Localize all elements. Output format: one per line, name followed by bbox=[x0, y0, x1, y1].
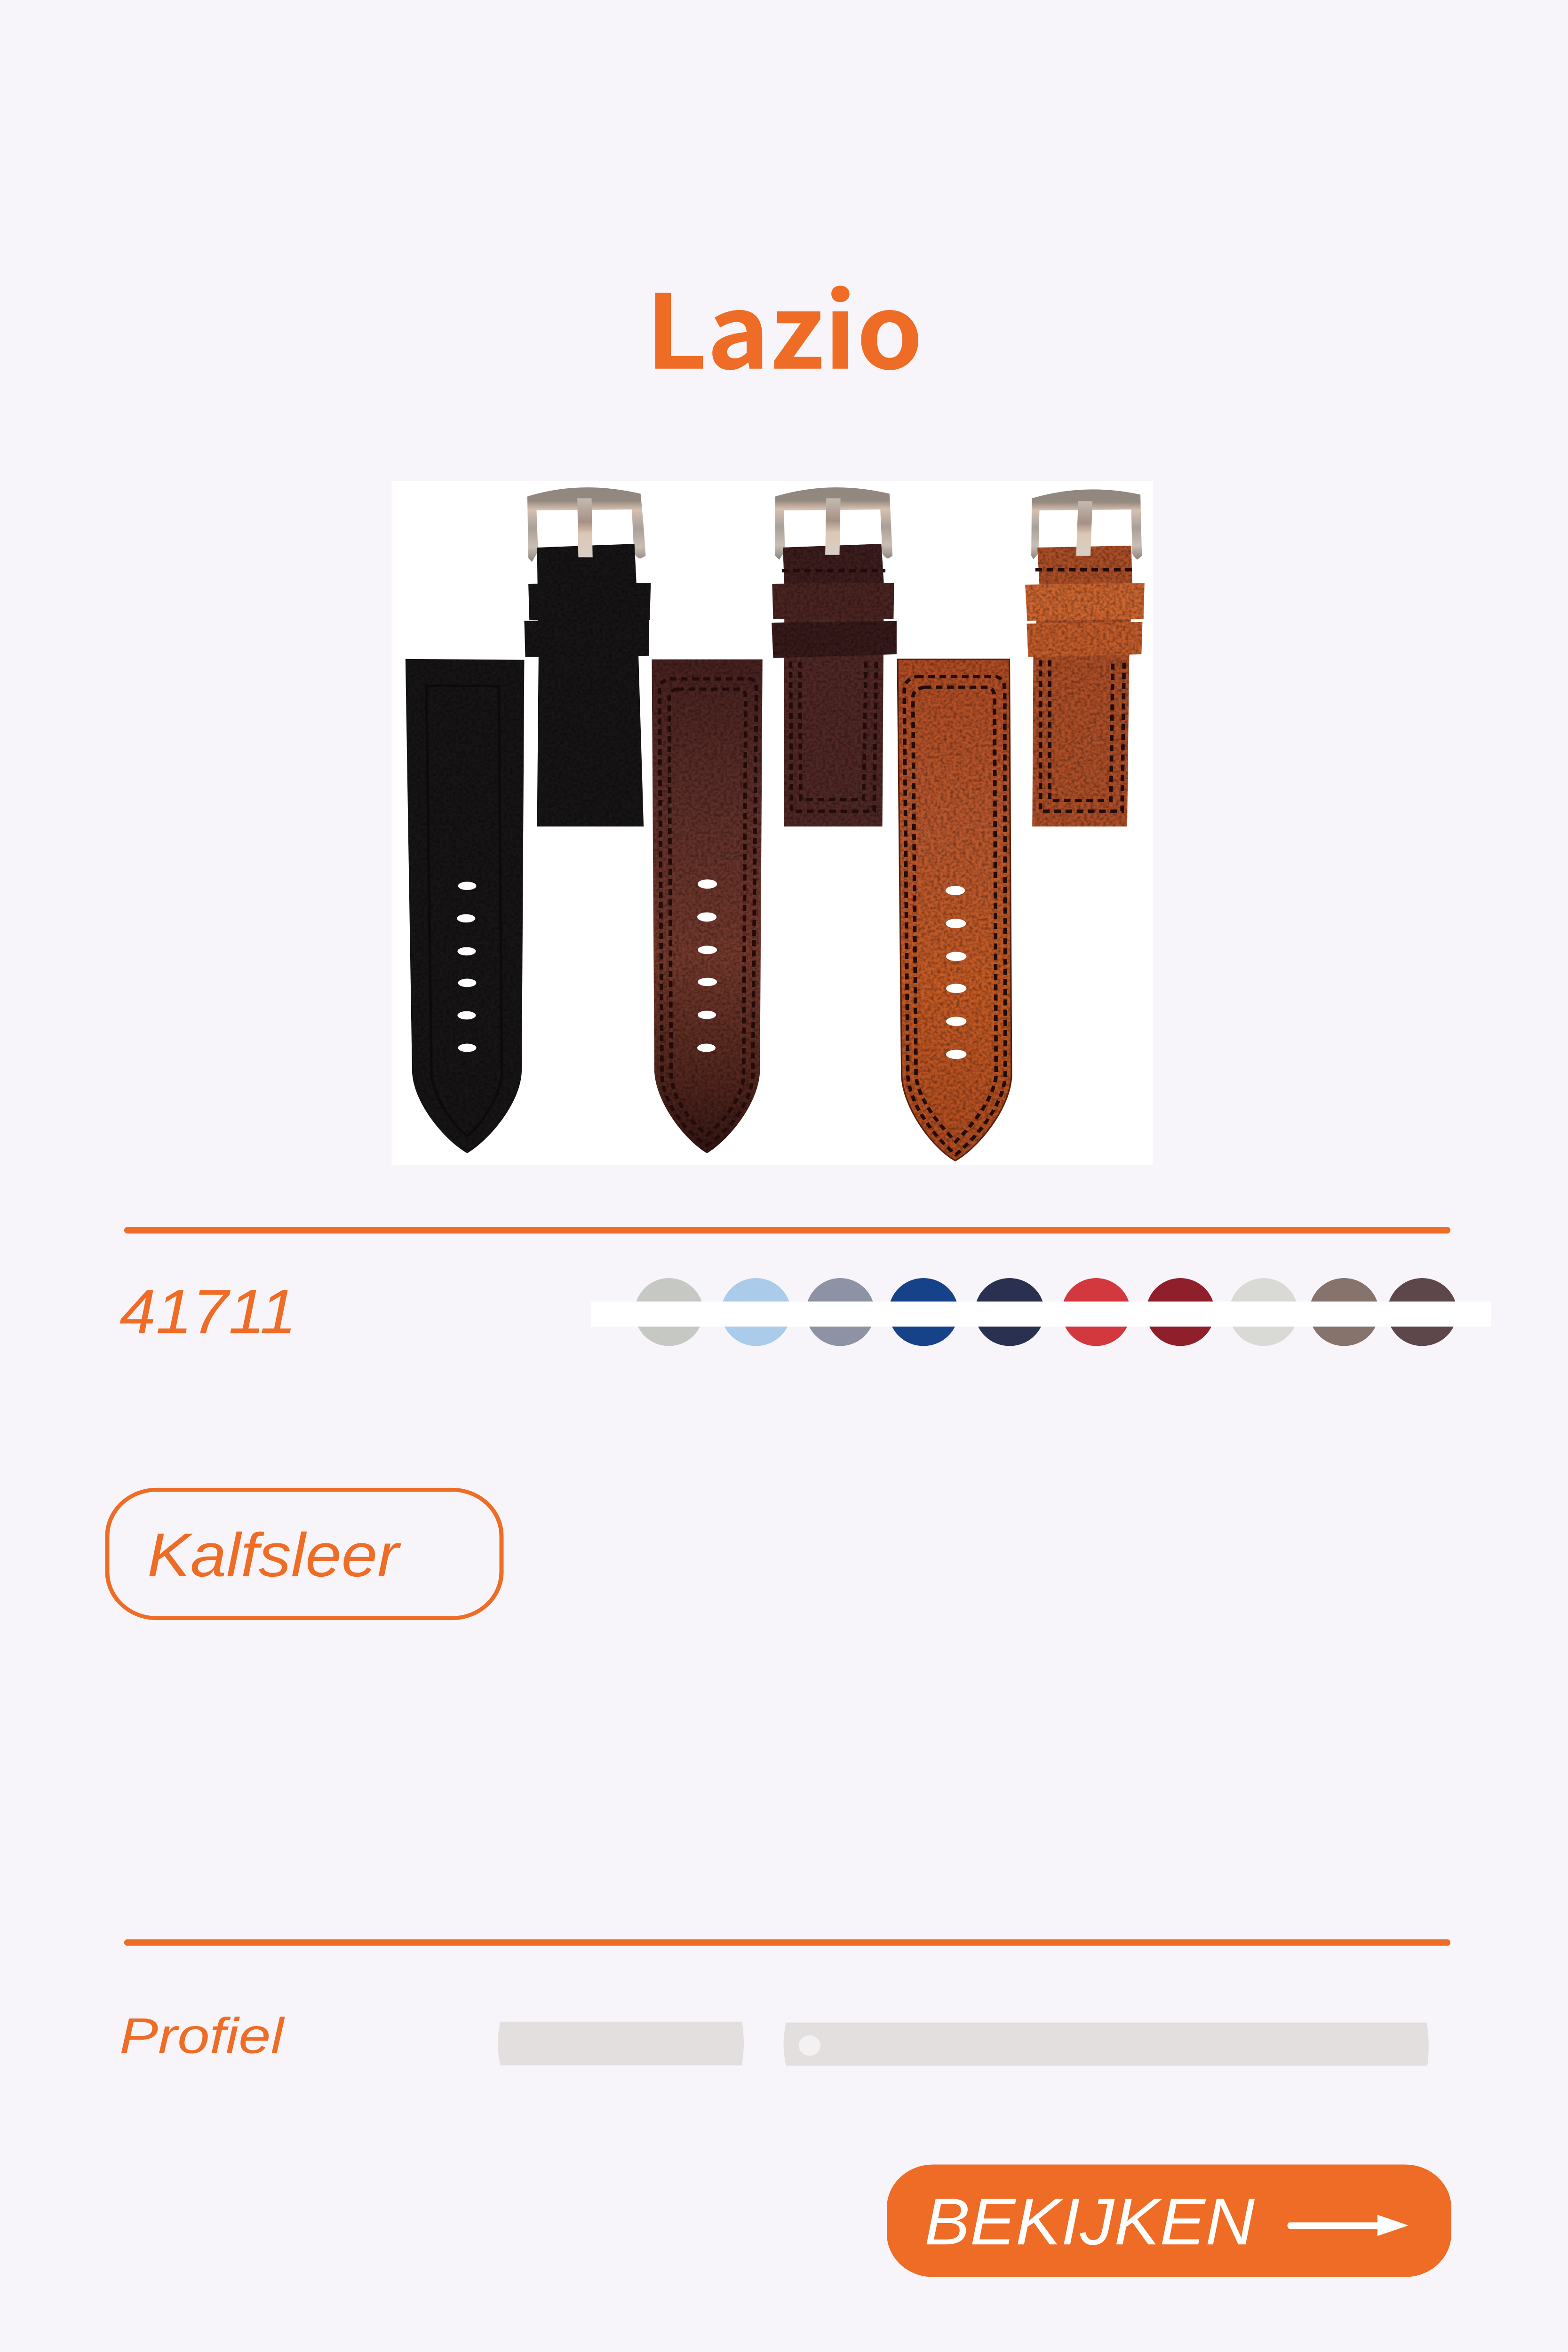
strap: tan buckle piece bbox=[1025, 489, 1145, 826]
material badge bbox=[107, 1490, 501, 1618]
colour swatches bbox=[591, 1278, 1491, 1346]
title: Lazio bbox=[645, 250, 923, 398]
strap: brown long piece bbox=[652, 660, 763, 1153]
strap: brown buckle piece bbox=[772, 487, 897, 826]
strap: tan long piece bbox=[898, 660, 1011, 1160]
strap: black buckle piece bbox=[524, 487, 651, 826]
divider: lower orange rule bbox=[124, 1939, 1450, 1946]
icon: arrow bbox=[1287, 2215, 1409, 2236]
divider: upper orange rule bbox=[124, 1227, 1450, 1233]
panel: product photo of three watch straps bbox=[392, 481, 1153, 1165]
material badge: Kalfsleer bbox=[147, 1520, 401, 1589]
profile diagram: long strap piece bbox=[784, 2023, 1429, 2066]
profile label: Profiel bbox=[119, 2008, 286, 2064]
photo white background bbox=[392, 481, 1153, 1165]
button: bekijken: BEKIJKEN bbox=[924, 2185, 1255, 2258]
strap: black long piece bbox=[406, 659, 524, 1153]
button: bekijken bbox=[887, 2165, 1451, 2277]
profile diagram: short strap piece bbox=[498, 2022, 744, 2066]
article number: 41711 bbox=[119, 1277, 296, 1347]
white band across swatches bbox=[591, 1302, 1491, 1327]
